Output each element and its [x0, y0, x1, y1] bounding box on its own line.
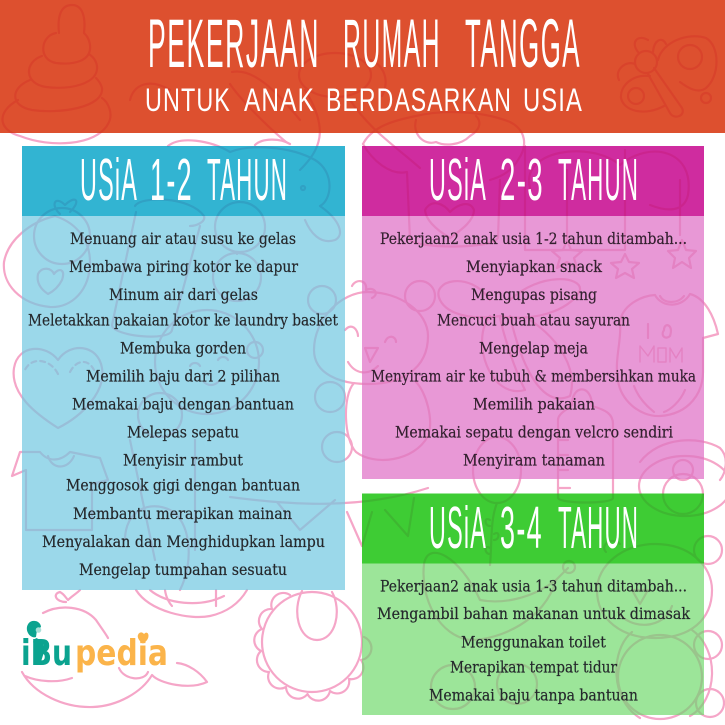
- doodle: whale: [22, 590, 207, 707]
- subtitle: ANAK: [244, 82, 315, 118]
- task list: usia 1-2 tahun: Menuang air atau susu ke gelas: [70, 230, 296, 248]
- logo: ibupedia: [21, 621, 168, 674]
- doodle: baby bottle left: [112, 199, 204, 337]
- doodle: bib hat top: [363, 112, 524, 247]
- task list: usia 3-4 tahun: Pekerjaan2 anak usia 1-3 tahun ditambah...: [380, 578, 687, 596]
- doodle: bow centre: [438, 279, 580, 398]
- task list: usia 1-2 tahun: Memakai baju dengan bantuan: [72, 396, 294, 414]
- task list: usia 1-2 tahun: Minum air dari gelas: [109, 286, 258, 304]
- task list: usia 2-3 tahun: Mengelap meja: [479, 340, 588, 358]
- task list: usia 1-2 tahun: Menyisir rambut: [123, 452, 244, 470]
- panel heading bar: usia 1-2 tahun: 1-2: [150, 147, 193, 213]
- doodle: spoon and pig: [130, 53, 420, 170]
- panel: usia 3-4 tahun: [362, 494, 704, 715]
- panel heading bar: usia 2-3 tahun: [362, 146, 704, 216]
- task list: usia 3-4 tahun: Mengambil bahan makanan untuk dimasak: [377, 605, 691, 623]
- doodle: rattle bottom: [125, 393, 195, 590]
- doodle: bunting: [230, 488, 428, 546]
- task list: usia 3-4 tahun: [377, 578, 691, 704]
- task list: usia 1-2 tahun: [28, 230, 339, 579]
- doodle: bottle right: [558, 389, 613, 502]
- doodle: balloon: [473, 437, 521, 565]
- logo: ibupedia: iBu: [21, 633, 72, 674]
- task list: usia 3-4 tahun: Memakai baju tanpa bantuan: [429, 686, 638, 704]
- task list: usia 1-2 tahun: Membantu merapikan mainan: [73, 505, 292, 523]
- panel heading bar: usia 1-2 tahun: USiA: [80, 147, 138, 213]
- task list: usia 1-2 tahun: Menyalakan dan Menghidupkan lampu: [42, 533, 325, 551]
- task list: usia 2-3 tahun: Pekerjaan2 anak usia 1-2 tahun ditambah...: [380, 230, 687, 248]
- doodle: stroller: [423, 553, 575, 709]
- panel heading bar: usia 3-4 tahun: [362, 494, 704, 564]
- doodle: butterfly: [618, 36, 716, 117]
- panel heading bar: usia 2-3 tahun: USiA: [429, 147, 487, 213]
- title: RUMAH: [343, 5, 441, 82]
- subtitle: USIA: [523, 82, 583, 118]
- icon: mother figure: [27, 621, 45, 665]
- doodle: heart: [14, 348, 102, 428]
- task list: usia 1-2 tahun: Meletakkan pakaian kotor ke laundry basket: [28, 312, 339, 330]
- doodle: baby face: [155, 310, 263, 414]
- doodle: elephant: [168, 140, 340, 241]
- doodle: bib: [254, 591, 371, 701]
- doodle: hanging stars: [525, 146, 696, 278]
- task list: usia 1-2 tahun: Memilih baju dari 2 pilihan: [86, 368, 280, 386]
- task list: usia 2-3 tahun: Mengupas pisang: [471, 286, 597, 304]
- doodle: bowl: [136, 590, 247, 617]
- task list: usia 1-2 tahun: Membuka gorden: [120, 340, 246, 358]
- doodle: bear bottom right: [597, 536, 724, 719]
- task list: usia 3-4 tahun: Menggunakan toilet: [461, 634, 607, 652]
- task list: usia 2-3 tahun: Memilih pakaian: [473, 396, 595, 414]
- header banner: [0, 0, 725, 133]
- task list: usia 2-3 tahun: Mencuci buah atau sayuran: [437, 312, 630, 330]
- task list: usia 2-3 tahun: Memakai sepatu dengan velcro sendiri: [395, 424, 673, 442]
- panel heading bar: usia 1-2 tahun: [22, 146, 345, 216]
- task list: usia 1-2 tahun: Membawa piring kotor ke dapur: [69, 258, 299, 276]
- task list: usia 1-2 tahun: Mengelap tumpahan sesuatu: [79, 561, 287, 579]
- task list: usia 2-3 tahun: Menyiram tanaman: [463, 452, 605, 470]
- icon: heart: [138, 633, 148, 643]
- logo: ibupedia: pedia: [75, 633, 168, 674]
- panel: usia 2-3 tahun: [362, 146, 704, 479]
- panel heading bar: usia 2-3 tahun: 2-3: [500, 147, 544, 213]
- doodle: small onesie left: [12, 452, 108, 530]
- doodle: teddy bear: [308, 281, 435, 462]
- task list: usia 2-3 tahun: [371, 230, 696, 470]
- panel heading bar: usia 1-2 tahun: TAHUN: [207, 147, 288, 213]
- panel heading bar: usia 3-4 tahun: USiA: [429, 495, 487, 561]
- subtitle: [145, 82, 583, 118]
- doodle: pacifier: [639, 440, 725, 516]
- panel: usia 1-2 tahun: [22, 146, 345, 590]
- subtitle: UNTUK: [145, 82, 231, 118]
- panel heading bar: usia 3-4 tahun: 3-4: [500, 495, 543, 561]
- doodle: apple: [4, 200, 90, 307]
- task list: usia 1-2 tahun: Menggosok gigi dengan bantuan: [66, 476, 300, 494]
- doodle: ring stacker: [2, 5, 110, 143]
- title: PEKERJAAN: [148, 5, 320, 82]
- doodle: onesie with I love mom: [617, 294, 718, 416]
- task list: usia 3-4 tahun: Merapikan tempat tidur: [450, 658, 618, 676]
- task list: usia 2-3 tahun: Menyiapkan snack: [466, 258, 603, 276]
- doodle: rattle: [213, 202, 265, 301]
- subtitle: BERDASARKAN: [326, 82, 512, 118]
- task list: usia 1-2 tahun: Melepas sepatu: [127, 424, 239, 442]
